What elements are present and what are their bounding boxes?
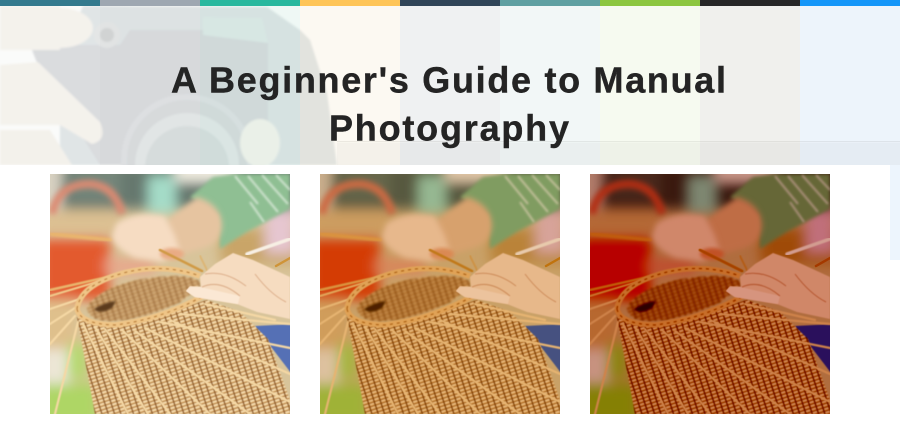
title bbox=[171, 60, 726, 148]
wall siding line bbox=[337, 141, 900, 142]
translucent colour columns bbox=[200, 6, 900, 165]
photo: underexposed basket weaving bbox=[580, 164, 840, 424]
photo: overexposed basket weaving bbox=[40, 164, 300, 424]
colour bar strip bbox=[0, 0, 900, 6]
hero banner with camera photo bbox=[0, 6, 900, 165]
icon: blurred camera held in hands bbox=[0, 6, 337, 165]
title: A Beginner's Guide to Manual bbox=[171, 60, 726, 100]
title: Photography bbox=[329, 108, 569, 148]
photo: balanced basket weaving bbox=[310, 164, 570, 424]
right edge light strip bbox=[890, 165, 900, 260]
